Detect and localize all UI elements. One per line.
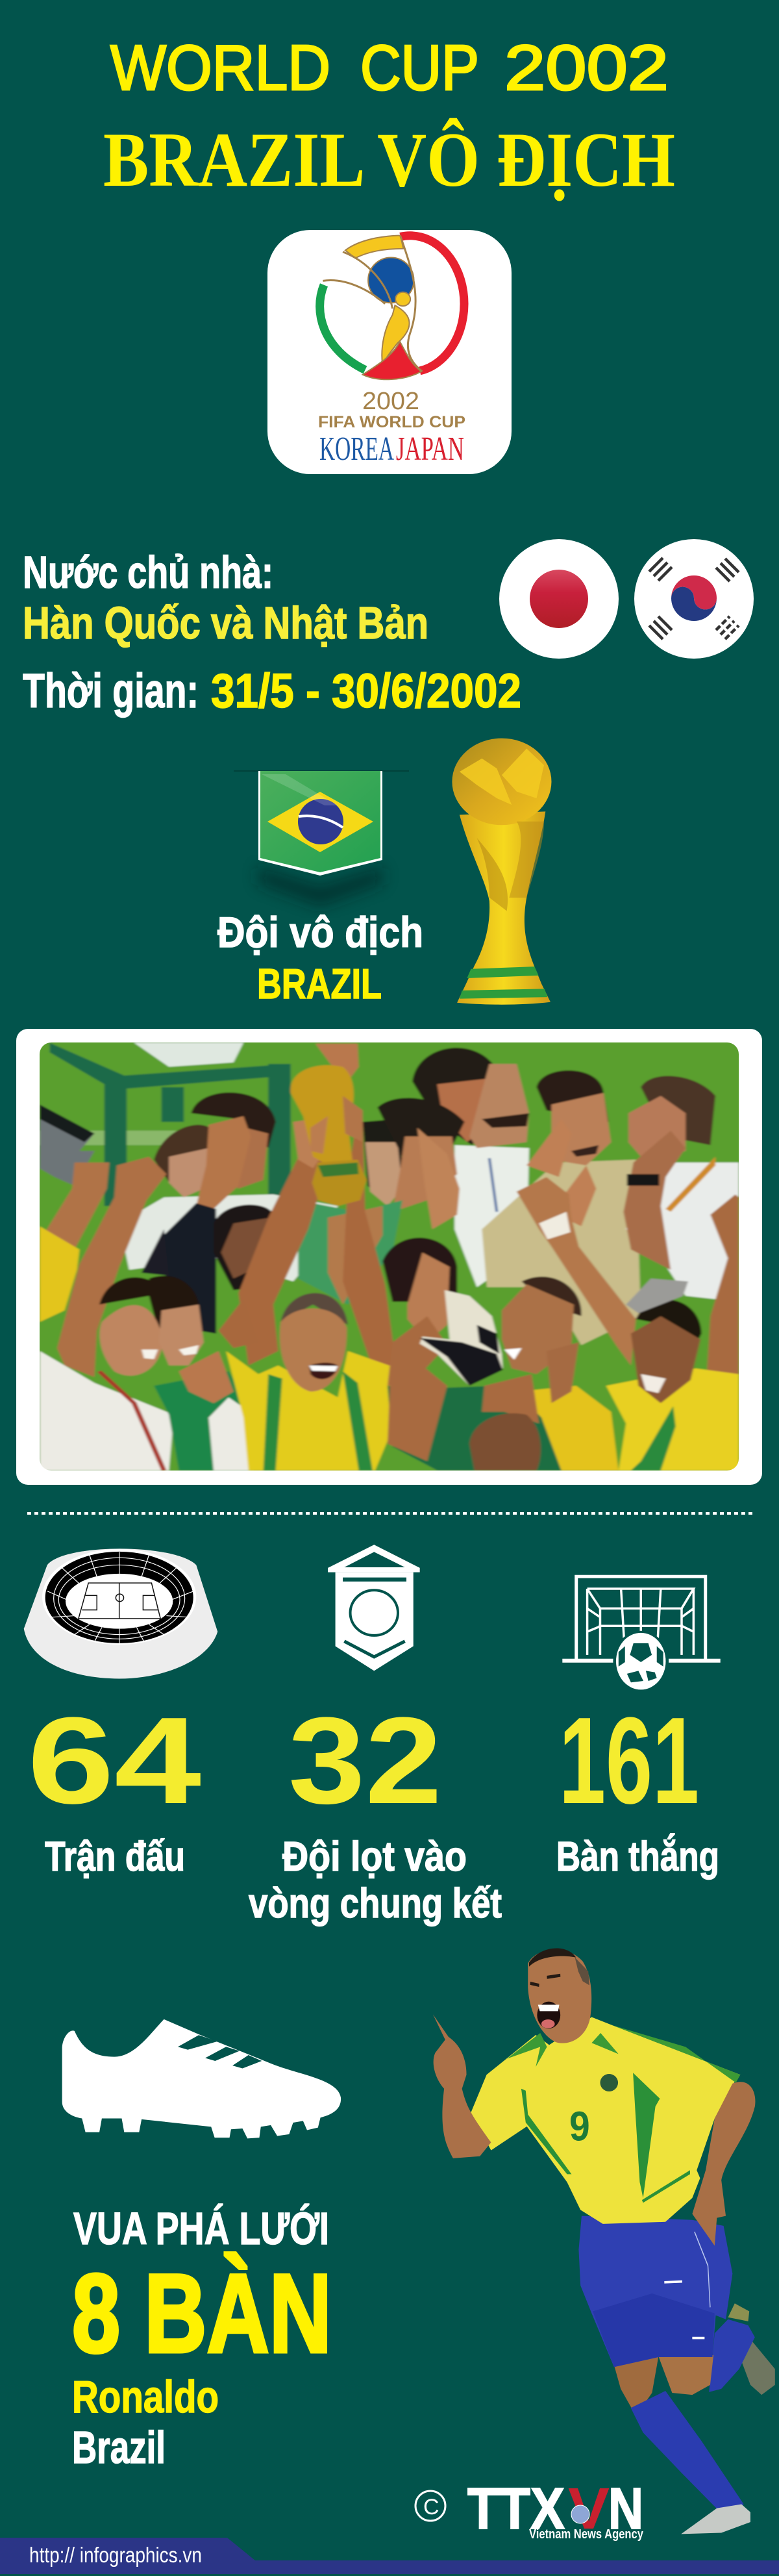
panel: team photo <box>16 1029 762 1485</box>
champion text <box>217 908 423 1007</box>
goalkeeper glove <box>420 1290 502 1386</box>
title: CUP <box>360 32 479 103</box>
footer band <box>0 2538 779 2574</box>
stat: 64 matches: Trận đấu <box>45 1833 185 1880</box>
head <box>528 1950 591 2043</box>
logo: TTXVN copyright: N <box>608 2477 643 2542</box>
stat: 32 teams: Đội lọt vào <box>282 1833 467 1880</box>
mid row left <box>119 1194 338 1282</box>
faces <box>99 1276 162 1329</box>
front boot <box>681 2504 750 2534</box>
icon: football boot <box>62 2019 341 2138</box>
front sock <box>631 2391 744 2520</box>
back row <box>454 1145 529 1287</box>
logo card: 2002 FIFA World Cup <box>267 230 512 474</box>
number 9 and crest: 9 <box>569 2104 590 2150</box>
divider <box>27 1512 755 1515</box>
knees <box>614 2355 659 2409</box>
icon: World Cup trophy <box>452 739 551 1005</box>
stat: 161 goals <box>556 1692 719 1880</box>
stat: 32 teams <box>249 1692 502 1926</box>
player: Ronaldo <box>433 1949 775 2534</box>
logo card: 2002 FIFA World Cup: 2002 <box>362 388 419 415</box>
dates text <box>23 664 521 718</box>
icon: stadium <box>24 1548 217 1678</box>
title: WORLD <box>110 32 330 103</box>
title: 2002 <box>504 32 669 103</box>
champion text: Đội vô địch <box>217 908 423 956</box>
stat: 32 teams: vòng chung kết <box>249 1880 502 1926</box>
logo: TTXVN copyright <box>415 2477 644 2542</box>
logo: TTXVN copyright: C <box>423 2495 439 2519</box>
photo: Brazil team lifting the trophy <box>20 1032 760 1478</box>
dates text: Thời gian: <box>23 664 199 718</box>
stat: 32 teams: 32 <box>288 1692 442 1830</box>
logo card: 2002 FIFA World Cup: JAPAN <box>396 431 464 468</box>
front row shirts <box>40 1351 174 1471</box>
top scorer text: VUA PHÁ LƯỚI <box>73 2203 329 2254</box>
players front <box>237 1159 322 1366</box>
trophy in photo <box>290 1065 354 1165</box>
footer url: http:// infographics.vn <box>29 2543 202 2567</box>
flag: Japan <box>499 539 619 659</box>
title <box>103 32 675 203</box>
host countries text <box>23 547 428 648</box>
icon: goal and ball <box>562 1576 721 1692</box>
stat: 161 goals: 161 <box>559 1692 699 1830</box>
logo: TTXVN copyright: Vietnam News Agency <box>529 2527 644 2542</box>
top scorer text: Ronaldo <box>72 2371 219 2422</box>
stat: 64 matches: 64 <box>27 1692 201 1830</box>
host countries text: Nước chủ nhà: <box>23 547 273 598</box>
shirt <box>471 2017 740 2224</box>
logo: TTXVN copyright: TTX <box>467 2477 565 2542</box>
top scorer text <box>72 2203 332 2473</box>
arms <box>692 2082 755 2246</box>
bald head and forearm <box>482 1374 539 1424</box>
top scorer text: 8 BÀN <box>72 2251 332 2376</box>
rear boot and leg <box>728 2303 749 2321</box>
champion text: BRAZIL <box>257 960 382 1007</box>
mid right / left arms <box>45 1161 112 1247</box>
logo: TTXVN copyright: V <box>568 2477 610 2542</box>
flag: South Korea <box>634 539 754 659</box>
stat: 64 matches <box>27 1692 201 1880</box>
logo card: 2002 FIFA World Cup: FIFA WORLD CUP <box>318 413 465 431</box>
logo card: 2002 FIFA World Cup: KOREA <box>319 431 394 468</box>
dates text: 31/5 - 30/6/2002 <box>211 664 521 718</box>
title: BRAZIL VÔ ĐỊCH <box>103 116 675 203</box>
icon: pennant <box>328 1545 420 1671</box>
flag pennant: Brazil <box>234 770 409 906</box>
top scorer text: Brazil <box>72 2422 166 2473</box>
shorts <box>578 2216 732 2367</box>
stat: 161 goals: Bàn thắng <box>556 1833 719 1880</box>
host countries text: Hàn Quốc và Nhật Bản <box>23 598 428 648</box>
